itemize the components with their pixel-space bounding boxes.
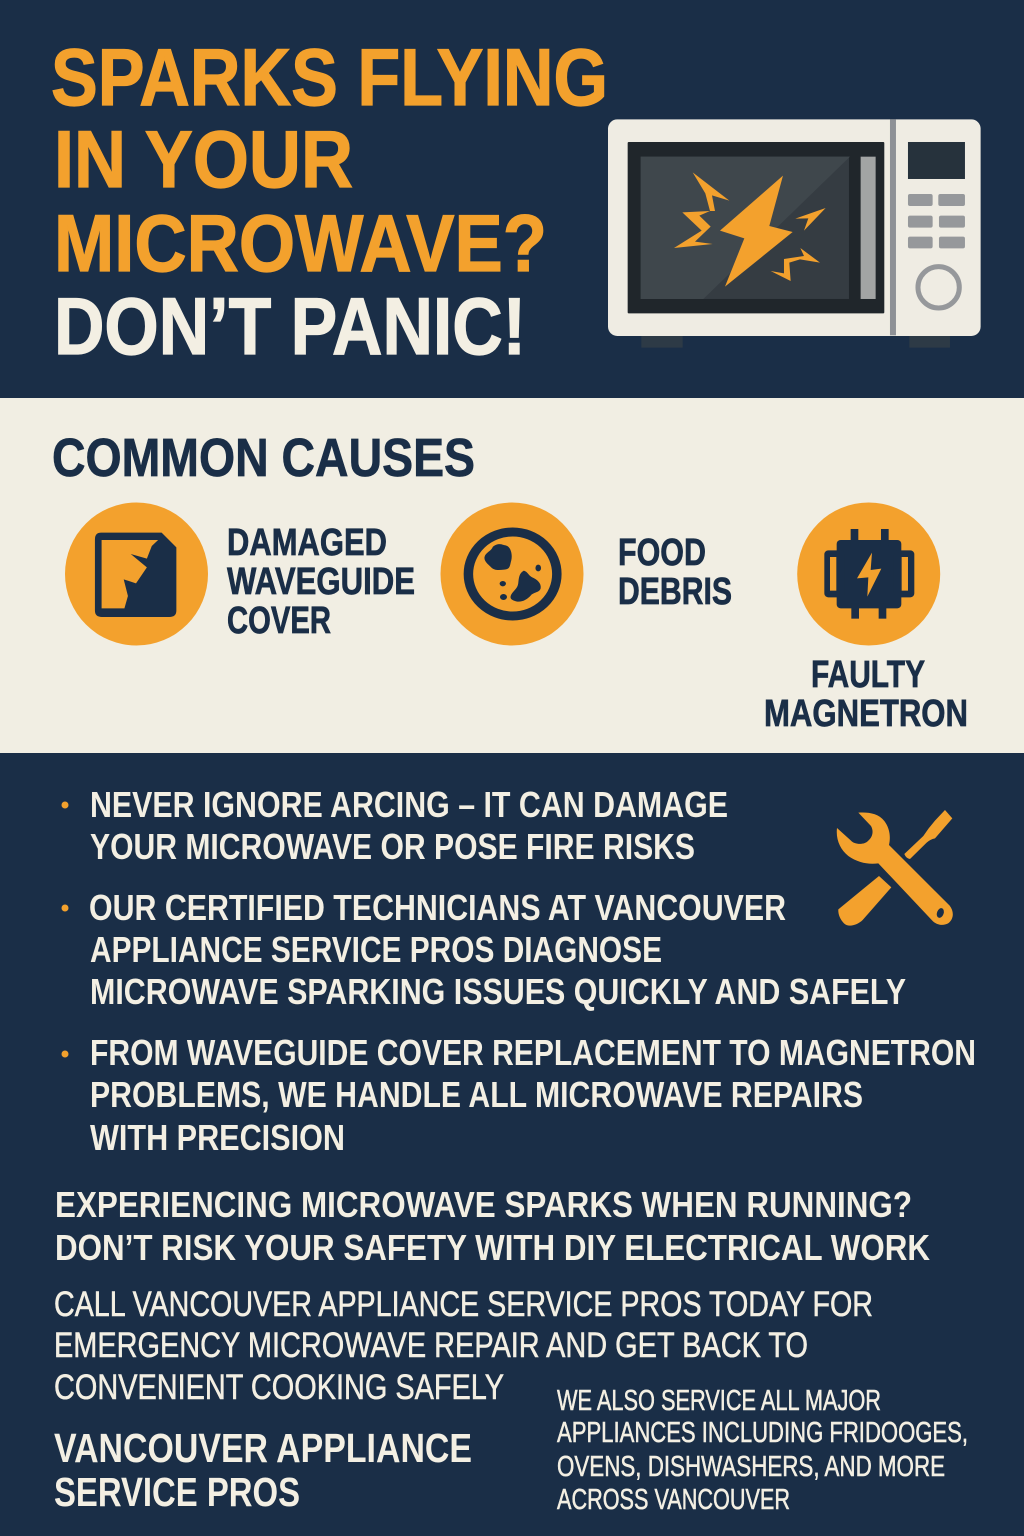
bullet 1 bbox=[62, 784, 728, 867]
company name: VANCOUVER APPLIANCE bbox=[54, 1425, 472, 1471]
icon: faulty magnetron bbox=[797, 502, 940, 646]
bullet 3: PROBLEMS, WE HANDLE ALL MICROWAVE REPAIRS bbox=[90, 1074, 863, 1115]
bullet 2: APPLIANCE SERVICE PROS DIAGNOSE bbox=[90, 929, 662, 970]
call to action bbox=[54, 1285, 873, 1407]
panel: details bbox=[54, 784, 976, 1516]
bullet 3: WITH PRECISION bbox=[90, 1117, 345, 1158]
company name bbox=[54, 1425, 472, 1515]
warning text bbox=[55, 1184, 930, 1268]
call to action: CONVENIENT COOKING SAFELY bbox=[54, 1368, 504, 1407]
bullet 3 bbox=[62, 1032, 976, 1158]
label: damaged waveguide cover bbox=[227, 522, 415, 642]
warning text: EXPERIENCING MICROWAVE SPARKS WHEN RUNNING? bbox=[55, 1184, 912, 1225]
label: food debris bbox=[618, 532, 732, 613]
other appliances note: WE ALSO SERVICE ALL MAJOR bbox=[557, 1385, 881, 1417]
bullet 2: OUR CERTIFIED TECHNICIANS AT VANCOUVER bbox=[89, 887, 786, 928]
bullet 1: YOUR MICROWAVE OR POSE FIRE RISKS bbox=[90, 826, 695, 867]
panel: common causes bbox=[0, 398, 1024, 753]
other appliances note: ACROSS VANCOUVER bbox=[557, 1484, 790, 1516]
icon: food debris bbox=[440, 502, 584, 646]
title: MICROWAVE? bbox=[54, 199, 547, 289]
call to action: EMERGENCY MICROWAVE REPAIR AND GET BACK TO bbox=[54, 1326, 808, 1365]
title: SPARKS FLYING bbox=[51, 33, 608, 123]
icon: damaged waveguide cover bbox=[65, 502, 208, 646]
bullet 2 bbox=[62, 887, 906, 1012]
icon: microwave with sparks bbox=[608, 119, 981, 348]
label: damaged waveguide cover: COVER bbox=[227, 600, 331, 642]
heading: common causes: COMMON CAUSES bbox=[52, 428, 475, 488]
label: food debris: FOOD bbox=[618, 532, 706, 574]
icon: wrench and screwdriver bbox=[837, 810, 953, 926]
label: damaged waveguide cover: DAMAGED bbox=[227, 522, 387, 564]
title: IN YOUR bbox=[54, 115, 353, 205]
other appliances note bbox=[557, 1385, 968, 1516]
label: faulty magnetron: FAULTY bbox=[811, 654, 925, 696]
label: faulty magnetron: MAGNETRON bbox=[764, 693, 968, 735]
bullet 1: NEVER IGNORE ARCING – IT CAN DAMAGE bbox=[90, 784, 728, 825]
title bbox=[51, 33, 608, 372]
label: damaged waveguide cover: WAVEGUIDE bbox=[227, 561, 415, 603]
panel: header bbox=[0, 0, 1024, 398]
label: food debris: DEBRIS bbox=[618, 571, 732, 613]
title: DON’T PANIC! bbox=[54, 282, 526, 372]
label: faulty magnetron bbox=[764, 654, 968, 735]
company name: SERVICE PROS bbox=[54, 1469, 300, 1515]
